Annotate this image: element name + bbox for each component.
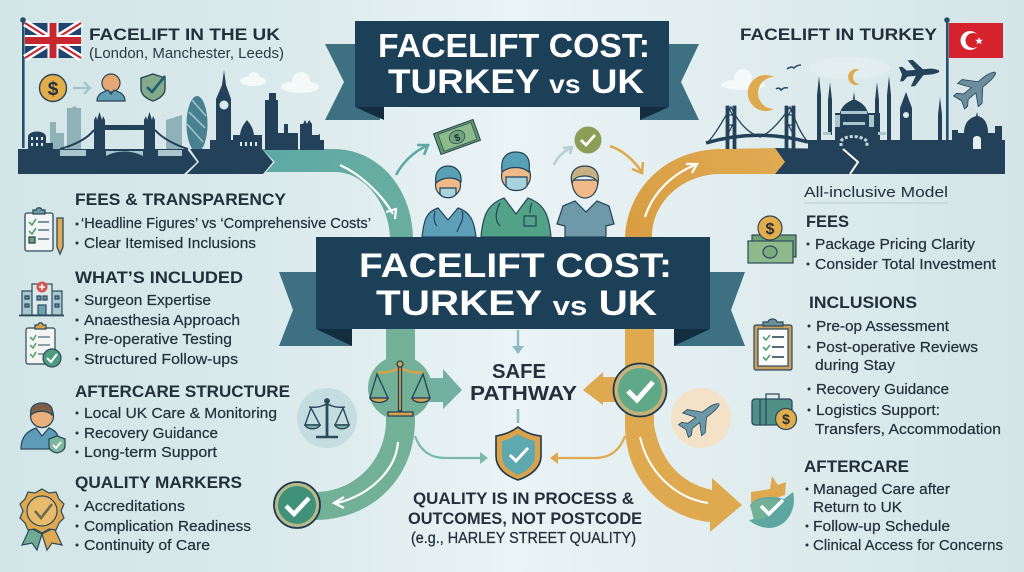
heading: safe pathway	[470, 361, 578, 405]
title text: line one: FACELIFT COST:	[378, 27, 650, 64]
orange pathway arrow: upper curve	[625, 148, 785, 237]
section: aftercare structure: AFTERCARE STRUCTURE	[75, 382, 290, 401]
icon: award rosette	[20, 489, 64, 550]
section: what's included	[75, 268, 243, 368]
section: inclusions: Post-operative Reviews	[816, 339, 978, 356]
section: aftercare: AFTERCARE	[804, 457, 909, 476]
section: aftercare structure	[75, 382, 290, 461]
title text: line two: TURKEY vs UK	[388, 63, 644, 101]
section: inclusions	[808, 293, 1001, 438]
icon: cash: $	[453, 132, 462, 145]
heading: safe pathway: PATHWAY	[470, 383, 578, 405]
arrow: green to shield	[415, 436, 488, 464]
Istanbul skyline	[706, 76, 1005, 174]
icon: dollar to surgeon to shield	[40, 74, 165, 102]
callout: quality statement: OUTCOMES, NOT POSTCODE	[408, 509, 642, 528]
section: aftercare structure: Local UK Care & Monitoring	[84, 405, 277, 422]
figure: female surgeon	[422, 166, 476, 237]
section: quality markers: Accreditations	[84, 498, 185, 515]
icon: suitcase and coin	[752, 394, 796, 430]
icon: central shield	[496, 427, 541, 480]
section: fees and transparency: Clear Itemised Inclusions	[84, 235, 256, 252]
section: fees: Package Pricing Clarity	[815, 236, 976, 253]
section: fees and transparency: FEES & TRANSPARENCY	[75, 190, 287, 209]
icon: managed aftercare badge	[749, 476, 794, 528]
icon: clipboard with check badge	[26, 323, 61, 367]
icon: plane in pale circle	[671, 388, 731, 448]
section: inclusions: during Stay	[815, 357, 896, 374]
heading: safe pathway: SAFE	[492, 361, 546, 383]
title text: line one: FACELIFT COST:	[359, 247, 672, 285]
icon: planes	[898, 58, 1005, 114]
figure: lead surgeon	[481, 152, 551, 237]
section: inclusions: INCLUSIONS	[809, 293, 917, 312]
icon: UK flag on pole	[20, 17, 81, 148]
icon: clouds	[721, 57, 890, 90]
orange pathway arrow: lower curve	[625, 329, 742, 532]
teal pathway arrow: upper curve	[262, 149, 413, 240]
icon: clipboard checklist	[754, 319, 792, 370]
arrow: grey to check	[554, 147, 572, 165]
callout: quality statement: (e.g., HARLEY STREET QUALITY)	[411, 530, 636, 547]
section: what's included: WHAT’S INCLUDED	[75, 268, 243, 287]
panel: UK details	[19, 190, 371, 554]
section: quality markers: Complication Readiness	[84, 518, 251, 535]
icon: banknotes and coin: $	[766, 221, 775, 238]
icon: green check badge	[274, 482, 320, 528]
connector: safe pathway to shield	[517, 409, 519, 423]
title text: line two: TURKEY vs UK	[376, 284, 657, 323]
Turkey header	[706, 17, 1005, 174]
section: fees: FEES	[806, 212, 849, 231]
title banner: centre	[279, 237, 745, 346]
section: aftercare structure: Long-term Support	[84, 444, 218, 461]
section: inclusions: Logistics Support:	[816, 402, 940, 419]
section: aftercare: Managed Care after	[813, 481, 950, 498]
section: fees and transparency	[75, 190, 371, 252]
section: aftercare: Clinical Access for Concerns	[813, 537, 1003, 554]
section: what's included: Anaesthesia Approach	[84, 312, 240, 329]
medical team	[396, 119, 643, 237]
arrow: orange to shield	[550, 436, 625, 464]
icon: approval check	[574, 126, 602, 154]
icon: clouds	[240, 72, 319, 93]
section: quality markers	[75, 473, 251, 554]
subheading: all-inclusive model: All-inclusive Model	[804, 184, 948, 201]
section: aftercare: Follow-up Schedule	[813, 518, 950, 535]
icon: crescents and birds	[748, 65, 860, 111]
section: quality markers: Continuity of Care	[84, 537, 210, 554]
figure: patient	[557, 166, 614, 237]
callout: quality statement	[408, 489, 642, 547]
UK header	[18, 17, 324, 174]
section: fees	[806, 212, 997, 273]
heading: Facelift in the UK: FACELIFT IN THE UK	[89, 25, 281, 44]
section: inclusions: Transfers, Accommodation	[815, 421, 1001, 438]
section: quality markers: QUALITY MARKERS	[75, 473, 242, 492]
arrow: check to orange	[610, 146, 643, 173]
green pathway arrow: lower curve	[297, 329, 415, 520]
title banner: top	[325, 21, 699, 120]
icon: orange check badge	[614, 364, 666, 416]
icon: Turkish flag on pole	[944, 17, 1003, 148]
section: fees: Consider Total Investment	[815, 256, 997, 273]
arrow: title to safe pathway	[512, 330, 524, 354]
heading: Facelift in Turkey: FACELIFT IN TURKEY	[740, 25, 938, 44]
icon: cash	[434, 119, 480, 155]
section: what's included: Pre-operative Testing	[84, 331, 232, 348]
section: what's included: Structured Follow-ups	[84, 351, 238, 368]
section: inclusions: Pre-op Assessment	[816, 318, 950, 335]
icon: scales in pale circle	[297, 388, 357, 448]
icon: suitcase and coin: $	[782, 411, 790, 427]
arrow: teal to cash	[396, 145, 428, 175]
section: aftercare: Return to UK	[813, 499, 902, 516]
subheading: UK cities: (London, Manchester, Leeds)	[89, 46, 284, 62]
section: what's included: Surgeon Expertise	[84, 292, 211, 309]
arrow: orange into safe pathway	[583, 372, 618, 405]
panel: Turkey details	[748, 184, 1003, 554]
icon: dollar to surgeon to shield: $	[48, 79, 59, 100]
arrow: green into safe pathway	[415, 369, 462, 409]
icon: scales on green circle	[368, 356, 432, 420]
London skyline	[18, 70, 324, 174]
icon: hospital	[19, 282, 64, 316]
section: aftercare	[804, 457, 1003, 554]
callout: quality statement: QUALITY IS IN PROCESS &	[413, 489, 634, 508]
section: inclusions: Recovery Guidance	[816, 381, 949, 398]
icon: clipboard and pencil	[25, 208, 63, 254]
section: fees and transparency: ‘Headline Figures’ vs ‘Comprehensive Costs’	[81, 215, 371, 232]
icon: banknotes and coin	[748, 216, 796, 263]
section: aftercare structure: Recovery Guidance	[84, 425, 218, 442]
icon: carer with shield	[21, 403, 65, 453]
